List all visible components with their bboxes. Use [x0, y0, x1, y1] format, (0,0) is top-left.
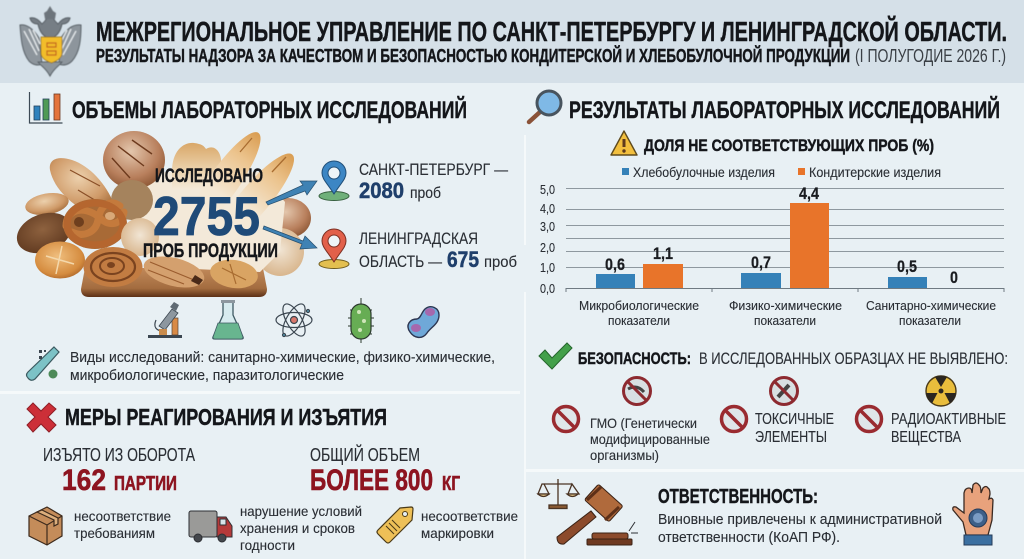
grid lines [566, 188, 1004, 292]
pretzel [63, 199, 127, 249]
icon: bacillus [348, 298, 374, 343]
text: responsibility description [658, 511, 942, 546]
text: GMO [590, 415, 710, 463]
chart legend [622, 165, 941, 180]
icon: red pin [319, 229, 349, 268]
heading: safety [578, 349, 1008, 368]
big left loaf [50, 158, 114, 214]
right loaves [265, 198, 311, 238]
bar values: 0 [950, 268, 958, 287]
panel: response measures [27, 403, 518, 553]
category labels: Микробиологические [579, 298, 699, 313]
text: storage violations [240, 503, 362, 553]
text: Saint Petersburg samples: проб [410, 185, 441, 202]
icon: magnifier [529, 91, 561, 122]
text: non-compliance with requirements [74, 508, 171, 541]
icon: box [29, 507, 62, 545]
text: research types: микробиологические, паразитологические [70, 367, 344, 384]
text: research types [70, 349, 495, 384]
text: labelling non-compliance [421, 508, 518, 541]
seeded bun [111, 180, 153, 220]
text: Saint Petersburg samples [359, 160, 508, 203]
text: radioactive substances: ВЕЩЕСТВА [891, 429, 961, 446]
stat: total volume: БОЛЕЕ 800 [310, 464, 433, 497]
small loaf left [24, 190, 70, 218]
icon: flask [213, 300, 243, 339]
text: Leningrad region samples [359, 229, 517, 272]
icon: prohibition radioactive [856, 406, 882, 432]
text: storage violations: нарушение условий [240, 503, 362, 519]
panel dividers [0, 135, 1024, 559]
category labels: показатели [754, 313, 816, 328]
text: labelling non-compliance: несоответствие [421, 508, 518, 524]
text: Leningrad region samples: 675 [447, 247, 479, 272]
bars [596, 203, 927, 288]
title [96, 15, 1007, 66]
heading: lab volumes: ОБЪЕМЫ ЛАБОРАТОРНЫХ ИССЛЕДОВАНИЙ [72, 96, 467, 124]
top dark loaf [103, 131, 165, 189]
y axis labels: 2,0 [540, 240, 555, 255]
heading: safety: БЕЗОПАСНОСТЬ: [578, 349, 691, 368]
text: GMO: модифицированные [590, 431, 710, 447]
heading: measures: МЕРЫ РЕАГИРОВАНИЯ И ИЗЪЯТИЯ [65, 404, 387, 430]
text: research types: Виды исследований: санитарно-химические, физико-химические, [70, 349, 495, 366]
icon: red cross [27, 403, 56, 432]
icon: prohibition toxins [722, 406, 746, 432]
text: responsibility description: ответственности (КоАП РФ). [658, 529, 840, 546]
label: researched: ИССЛЕДОВАНО [155, 166, 263, 187]
baguettes [177, 124, 271, 240]
icon: prohibition GMO [554, 406, 578, 432]
icon: emblem [20, 6, 81, 76]
icon: hand [953, 483, 993, 545]
text: Leningrad region samples: ОБЛАСТЬ — [359, 252, 442, 271]
y axis labels [540, 182, 555, 296]
stat: withdrawn batches: 162 [62, 464, 106, 497]
bar values: 0,7 [751, 253, 771, 272]
panel: responsibility [538, 479, 993, 546]
rye loaf [11, 206, 77, 260]
arrow: to Saint Petersburg [266, 181, 317, 205]
panel: lab results [529, 91, 1004, 328]
stat: withdrawn batches [43, 444, 195, 497]
icon: warning triangle [611, 131, 637, 155]
bar values [605, 184, 958, 287]
text: toxic elements: ЭЛЕМЕНТЫ [755, 429, 827, 446]
header band [0, 0, 1024, 83]
category labels: показатели [899, 313, 961, 328]
text: Leningrad region samples: ЛЕНИНГРАДСКАЯ [359, 229, 478, 248]
category labels: показатели [608, 313, 670, 328]
bar values: 4,4 [799, 184, 819, 203]
stat: total volume: КГ [442, 473, 460, 495]
icon: bar chart [30, 92, 62, 123]
text: non-compliance with requirements: требованиям [74, 525, 155, 541]
pastry [208, 257, 260, 291]
illustration: bread [11, 124, 311, 297]
number: 2755: 2755 [153, 185, 260, 247]
round roll [35, 242, 85, 278]
text: storage violations: годности [240, 537, 295, 553]
text: labelling non-compliance: маркировки [421, 525, 494, 541]
cinnamon roll [84, 247, 142, 287]
label: samples: ПРОБ ПРОДУКЦИИ [143, 241, 278, 262]
icon: no toxins [770, 378, 798, 404]
text: Leningrad region samples: проб [484, 254, 517, 271]
bar chart [540, 182, 1004, 328]
stat: withdrawn batches: ИЗЪЯТО ИЗ ОБОРОТА [43, 444, 195, 465]
category labels: Физико-химические [729, 298, 842, 313]
sample count [143, 166, 278, 262]
text: non-compliance with requirements: несоответствие [74, 508, 171, 524]
icon: truck [189, 511, 232, 542]
panel: lab volumes [11, 92, 517, 384]
icon: gavel [557, 484, 638, 545]
text: storage violations: хранения и сроков [240, 520, 355, 536]
bar values: 0,6 [605, 255, 625, 274]
y axis labels: 5,0 [540, 182, 555, 197]
bar values: 0,5 [897, 257, 917, 276]
text: GMO: ГМО (Генетически [590, 415, 697, 431]
chart legend: Хлебобулочные изделия [633, 165, 775, 180]
stat: total volume: ОБЩИЙ ОБЪЕМ [310, 444, 420, 465]
bar values: 1,1 [653, 244, 673, 263]
icon: atom [276, 301, 312, 339]
stat: total volume [310, 444, 460, 497]
stat: withdrawn batches: ПАРТИИ [114, 473, 177, 495]
arrow: to Leningrad region [263, 226, 317, 249]
croissant pastry [141, 251, 207, 293]
baguette pieces [172, 143, 224, 189]
panel: safety [539, 343, 1008, 463]
chart title: ДОЛЯ НЕ СООТВЕТСТВУЮЩИХ ПРОБ (%) [644, 136, 934, 155]
icon: check mark [539, 343, 572, 369]
icon: test tube [26, 347, 59, 380]
text: toxic elements [755, 411, 834, 446]
category labels: Санитарно-химические [866, 298, 996, 313]
category labels [579, 298, 996, 328]
board [81, 268, 267, 297]
icon: scales [538, 479, 579, 508]
text: GMO: организмы) [590, 447, 659, 463]
chart legend: Кондитерские изделия [809, 165, 941, 180]
icon: blue pin [319, 161, 349, 200]
y axis labels: 0,0 [540, 281, 555, 296]
text: radioactive substances [891, 411, 1006, 446]
y axis labels: 3,0 [540, 219, 555, 234]
text: Saint Petersburg samples: САНКТ-ПЕТЕРБУРГ — [359, 160, 508, 179]
heading: responsibility: ОТВЕТСТВЕННОСТЬ: [658, 486, 818, 508]
pale roll [121, 218, 159, 256]
text: Saint Petersburg samples: 2080 [359, 178, 404, 203]
icon: microscope [148, 302, 182, 338]
icon: no GMO [624, 378, 650, 404]
pale centre [135, 172, 285, 272]
icon: tag [377, 507, 413, 543]
text: toxic elements: ТОКСИЧНЫЕ [755, 411, 834, 428]
y axis labels: 1,0 [540, 260, 555, 275]
icon: microbe [408, 307, 439, 337]
icon: radiation [926, 376, 956, 406]
y axis labels: 4,0 [540, 201, 555, 216]
text: responsibility description: Виновные привлечены к административной [658, 511, 942, 528]
